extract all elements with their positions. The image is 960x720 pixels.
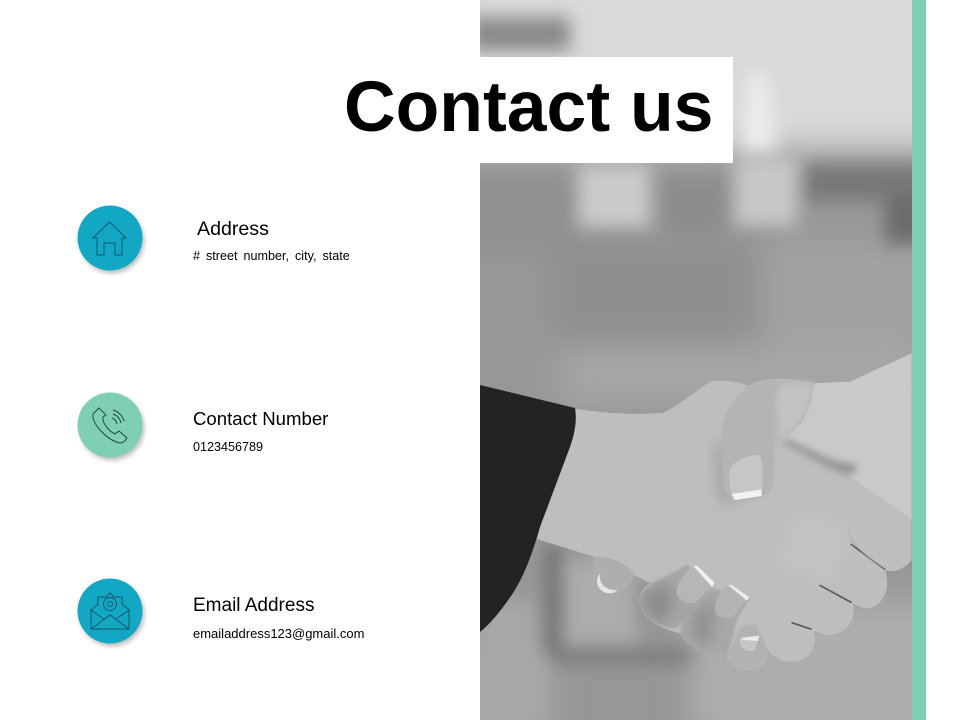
right arm and palm [748,353,912,520]
right thumb [722,379,813,503]
email heading: Email Address [193,595,314,616]
left hand and palm [535,381,912,670]
photo: handshake on blurred office background [480,0,912,720]
icon: phone [77,392,147,463]
little finger [728,625,767,670]
fingernail: index [676,567,713,603]
icon: house [77,206,147,276]
address text: # street number, city, state [193,249,350,263]
title: Contact us [344,67,713,147]
sleeve [480,385,576,632]
finger creases [792,544,885,629]
accent bar [912,0,926,720]
handshake, drawn in zoomed coordinates [535,353,912,670]
thumb shadow [712,443,734,506]
title plate [480,57,733,163]
icon: envelope [77,578,147,649]
palm highlight [820,544,852,586]
email text: emailaddress123@gmail.com [193,626,364,641]
contact number heading: Contact Number [193,408,328,429]
address heading: Address [197,218,269,240]
soft background blocks [480,0,912,720]
lower finger shading [639,565,715,628]
contact number text: 0123456789 [193,440,263,454]
thumbnail [729,455,763,500]
left thumb [593,557,634,581]
fingernail: middle [715,585,748,618]
